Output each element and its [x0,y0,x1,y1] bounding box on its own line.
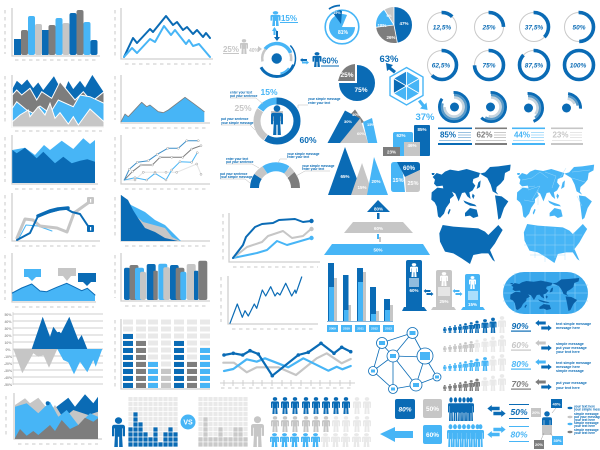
pie chart 81% [325,6,359,44]
box 80%: 80% [398,406,412,414]
grid lines [13,312,103,385]
tower: 25% [431,270,456,310]
people scale row 70% [443,374,587,391]
stat bar 44%: 44% [514,130,530,140]
pie chart 47 / 26 / 18 / 9: 9% [386,14,392,18]
label 25% and gray person: 40% [249,48,260,54]
crowd: light blue group [447,424,484,447]
versus comparison: right gray tile grid and person [200,397,264,447]
legend: simple message [574,428,599,432]
percent labels [234,87,317,145]
axis labels: -50% [4,383,13,387]
pie chart 75 / 25: 75% [354,87,368,94]
triangle chart 65 / 15 / 20 [328,147,388,195]
icon: vertical arrows [272,27,280,41]
hexagon diagram [379,54,435,123]
icon: person with gray panel [271,105,283,135]
icon: gray person [251,416,264,447]
tower: 15% [461,274,485,310]
ring 75% [474,50,504,80]
icon: blue person [112,417,125,447]
captions: enter your text [287,155,310,159]
versus badge: VS [183,420,193,426]
axis labels: 0% [5,348,11,352]
label 15%: 15% [281,14,297,23]
axis labels: -40% [4,376,13,380]
axis labels: 20% [4,334,12,338]
ring 62.5%: 62,5% [432,62,450,70]
ring 75%: 75% [482,62,496,70]
world map: light blue with country lines [517,165,594,220]
stepped block chart: 85% [417,127,427,132]
double bar chart with year labels [327,263,394,332]
column 4 [161,368,171,388]
ring 100%: 100% [570,62,587,70]
stat bar 62%: 62% [476,130,493,140]
stat bar 85%: 85% [440,130,456,140]
captions: put your sentence [221,117,249,121]
people scale row 70%: your text here [556,386,580,390]
person with callouts [531,399,563,449]
pie chart 47 / 26 / 18 / 9 [376,6,409,43]
triangle chart: overlapping peaks: 40% [352,112,360,117]
stat 80% with double arrows [487,426,529,442]
area chart: descending layered area [115,195,210,246]
axis labels [4,313,13,387]
network nodes [368,328,441,394]
pie chart 81%: 81% [338,30,349,36]
pie chart 47 / 26 / 18 / 9: 26% [386,35,396,40]
column 2 [136,340,146,388]
captions [220,152,335,179]
pyramid layers: 80% [374,206,383,212]
row gray [271,416,371,432]
bar chart: overlapping rounded bars [115,253,210,306]
icon: double arrows between towers 2 [452,289,462,296]
ring 50% [564,12,594,42]
label 63% with arrow: 63% [379,54,399,65]
captions: put your sentence [220,172,248,176]
year labels: 2011 [357,326,364,330]
axis labels: -20% [4,362,13,366]
grid background [130,397,176,447]
label 37% with arrow: 37% [415,112,435,123]
legend [568,404,600,435]
triangle chart: overlapping peaks: 60% [357,131,365,136]
triangle chart: overlapping peaks [328,110,377,143]
flag: blue [87,225,94,232]
stat 50% with double arrows: 50% [510,407,528,417]
ring 12.5% [428,12,456,42]
line chart: three smooth lines [223,213,320,267]
ring 25%: 25% [481,24,496,32]
pyramid layers: 60% [374,226,383,231]
triangle chart 65 / 15 / 20: 15% [357,185,367,190]
pie chart 47 / 26 / 18 / 9: 47% [399,21,409,26]
blue columns [130,412,176,447]
radial progress 44% [514,94,542,122]
column 6 [187,361,197,388]
legend: your text here [574,424,595,428]
area chart: single blue peak area [115,75,210,128]
triangle chart: overlapping peaks: 15% [367,122,375,127]
people scale row 60% [443,335,587,354]
pie chart 47 / 26 / 18 / 9: 18% [377,23,387,28]
column 3 [148,361,158,388]
people scale row 80% [443,354,591,373]
year labels: 2009 [329,326,336,330]
callout: light blue [24,269,41,281]
people scale row 60%: 60% [511,340,529,350]
ring 100% [564,50,594,80]
triangle chart: overlapping peaks: 30% [344,119,352,124]
arch diagram [220,152,335,188]
box 60% [423,425,442,444]
year labels: 2010 [343,326,350,330]
line chart: four lines with round markers [115,135,210,189]
callout 20% dark gray: 20% [535,442,543,447]
axis labels: 30% [4,327,12,331]
radial progress 62% [476,92,506,122]
captions: your simple message [302,164,335,168]
stat bar 62% [475,128,507,145]
callout: dark blue [78,273,96,286]
rounded split block 60 / 15 / 25: 25% [407,181,419,187]
people scale row 80%: 80% [511,359,529,369]
tile grid chart: seven columns [115,319,210,389]
captions: your simple message [221,121,254,125]
versus comparison: left person and tile grid [112,397,176,447]
callout 20% gray: 20% [532,410,540,415]
column 1 [123,333,133,388]
callout 40%: 40% [552,402,561,406]
people scale row 60%: put your message [556,346,587,350]
legend: your text here [574,418,595,422]
tower: 60%: 60% [409,288,419,293]
network diagram [368,328,441,394]
ring 50%: 50% [572,24,586,32]
triangle chart 65 / 15 / 20: 65% [340,174,350,179]
big left arrow [380,427,413,442]
USA map: solid dark blue [439,225,503,264]
pie chart 81%: 19% [333,11,341,15]
callout: gray [58,268,76,281]
label 60% and blue person: 60% [322,56,338,66]
column 5 [174,340,184,388]
box 50%: 50% [426,406,439,413]
legend: your text here [574,431,595,435]
captions: your simple message [308,97,341,101]
percent labels: 15% [260,87,278,97]
pyramid layers: 50% [373,248,383,252]
stepped block chart: 62% [396,133,406,138]
stepped block chart: 46% [407,143,417,148]
area chart: four stacked zigzag layers [5,74,104,131]
people scale row 90%: 90% [511,321,529,331]
area chart with three callouts [5,253,96,307]
area chart: two overlapping areas [5,135,98,189]
radial progress 23% [549,91,583,125]
percent labels: 60% [299,135,317,145]
ring 87.5%: 87,5% [525,62,543,70]
crowd: dark blue group [448,397,474,421]
people scale row 90% [443,316,591,333]
captions: enter your text [308,101,331,105]
ring 12.5%: 12,5% [433,24,451,32]
ring 37.5% [520,12,548,42]
flag: gray [87,197,94,204]
legend: simple message [574,412,599,416]
axis labels: 50% [4,313,12,317]
label 25% and gray person [223,39,262,54]
line chart: two zigzag lines [115,8,213,64]
people scale row 70%: put your message [556,381,587,385]
USA map: light blue with state lines [524,224,587,263]
people scale row 70%: 70% [511,379,529,389]
axis labels: -30% [4,369,13,373]
captions: put your sentence [230,94,258,98]
line chart: three lines with years axis [220,343,355,388]
captions: enter your text [302,167,325,171]
row light blue [270,433,371,447]
stat bar 85% [438,128,472,145]
rounded split block 60 / 15 / 25: 15% [392,178,404,184]
stepped block chart [383,125,430,156]
captions [221,90,341,125]
people scale row 90%: message here [556,326,580,330]
column 7 [200,347,210,388]
year labels: 2012 [371,326,378,330]
rounded split block 60 / 15 / 25: 60% [403,166,416,172]
people scale row 80%: simple message [556,369,584,373]
radial progress 85% [440,92,468,122]
area chart: four overlapping zigzag layers [6,393,102,444]
ring diagram with persons [223,11,339,85]
pyramid layers [324,200,430,255]
triangle chart 65 / 15 / 20: 20% [371,179,381,184]
people scale row 60%: simple message [556,342,584,346]
captions: enter your text [230,90,253,94]
percent labels: 25% [234,103,252,113]
icon: person 15% [270,11,280,26]
row dark blue [271,397,371,414]
box 60%: 60% [426,432,439,439]
people scale row 80%: text simple message [556,361,591,365]
captions: enter your text [226,157,249,161]
pie chart 75 / 25: 25% [340,72,354,79]
percent rings row 2 [428,50,594,80]
year labels [327,325,394,332]
legend: simple message [574,421,599,425]
stat bar 23% [551,128,583,145]
ring 87.5% [520,50,548,80]
box 50% [423,399,442,418]
legend: your text here [574,404,595,408]
box 80% [395,399,415,419]
captions: your simple message [220,175,253,179]
rounded split block 60 / 15 / 25 [391,162,420,192]
people scale row 80%: message here [556,365,580,369]
stat 50% with double arrows [487,404,529,419]
stat bar 44% [512,128,545,145]
label 25% and gray person: 25% [223,45,239,54]
donut chart with person [221,87,341,145]
bar chart: twelve vertical bars [5,8,100,60]
axis labels: -10% [4,355,13,359]
people scale row 90%: text simple message [556,322,591,326]
world map on rounded oval panel [503,272,588,314]
callout 30%: 30% [553,438,562,443]
stepped block chart: 23% [387,150,396,154]
year labels: 2013 [385,326,392,330]
ring 25% [474,12,504,42]
stat bar 23%: 23% [552,130,569,140]
tower: 25%: 25% [439,299,449,304]
world map: solid dark blue [431,165,511,220]
positive and negative area chart [4,312,103,387]
ring 62.5% [428,50,456,80]
ring 37.5%: 37,5% [525,24,543,32]
tower: 60% [402,260,427,311]
people rows chart [270,397,371,447]
tower: 15%: 15% [468,302,477,307]
captions: your simple message [287,152,320,156]
line chart: thick lines with end flags [5,193,100,246]
versus badge [180,414,196,430]
stat 80% with double arrows: 80% [510,430,528,440]
axis labels: 40% [4,320,12,324]
captions: put your sentence [226,160,254,164]
icon: double arrows between towers 1 [424,289,434,296]
line chart: rising zigzag [221,276,318,329]
people scale row 60%: your text here [556,350,580,354]
axis labels: 10% [4,341,12,345]
percent rings row 1 [428,12,594,42]
pie chart 75 / 25 [338,64,368,94]
